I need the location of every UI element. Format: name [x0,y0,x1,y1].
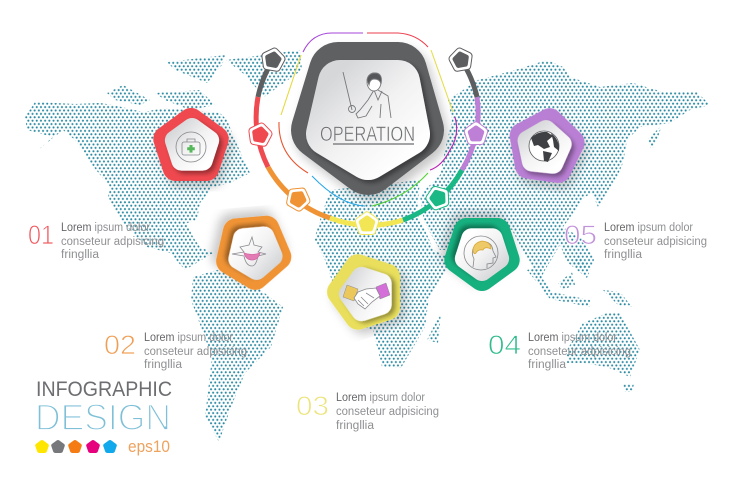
step 02 text: fringllia [144,359,183,371]
operation label: OPERATION [320,123,415,146]
step 01 text: 01 [28,220,54,250]
panel 3: yellow pentagon [334,260,396,320]
step 04 text [488,330,631,371]
title: infographic design: INFOGRAPHIC [36,378,172,401]
ring node: gray right [452,51,470,68]
step 05 text: 05 [564,220,597,250]
ring node: green [428,188,447,207]
central panel: operation [320,71,415,166]
ring node: gray left [264,51,282,68]
step 03 text: 03 [296,391,329,421]
step 02 text: conseteur adpisicing [144,346,247,358]
step 03 text: Lorem ipsum dolor [336,392,425,404]
step 03 text: fringllia [336,420,375,432]
step 01 text: conseteur adpisicing [61,236,164,248]
step 02 text [104,330,247,371]
ring node: red [251,126,269,143]
step 02 text: Lorem ipsum dolor [144,332,233,344]
panel 5: purple pentagon [519,118,574,171]
ring node: orange [288,188,309,208]
connector ring [256,60,478,225]
panel 1: red pentagon [166,121,216,168]
title: infographic design [35,378,172,438]
panel 4: green pentagon [457,231,507,278]
icon: head with brain [464,236,498,270]
step 01 text: fringllia [61,249,100,261]
step 04 text: Lorem ipsum dolor [528,332,617,344]
thin rainbow outline [279,33,457,206]
eps10 label: eps10 [128,437,170,456]
step 03 text [296,391,439,432]
icon: first aid case [176,132,206,162]
ring node: yellow [359,216,375,230]
title: infographic design: DESIGN [35,397,171,438]
colour pentagon legend [37,442,115,451]
step 04 text: fringllia [528,359,567,371]
icon: mouth and anatomy [232,237,266,266]
step 03 text: conseteur adpisicing [336,406,439,418]
step 05 text [564,220,707,261]
panel 2: orange pentagon [227,228,280,279]
step 04 text: 04 [488,330,521,360]
ring node: purple [468,126,484,140]
step 02 text: 02 [104,330,136,360]
step 04 text: conseteur adpisicing [528,346,631,358]
icon: presenter with pointer [343,72,391,118]
icon: globe [529,131,559,162]
world map [25,50,710,442]
step 05 text: fringllia [604,249,643,261]
step 01 text: Lorem ipsum dolor [61,222,150,234]
icon: handshake [343,283,390,309]
step 01 text [28,220,164,261]
step 05 text: conseteur adpisicing [604,236,707,248]
step 05 text: Lorem ipsum dolor [604,222,693,234]
